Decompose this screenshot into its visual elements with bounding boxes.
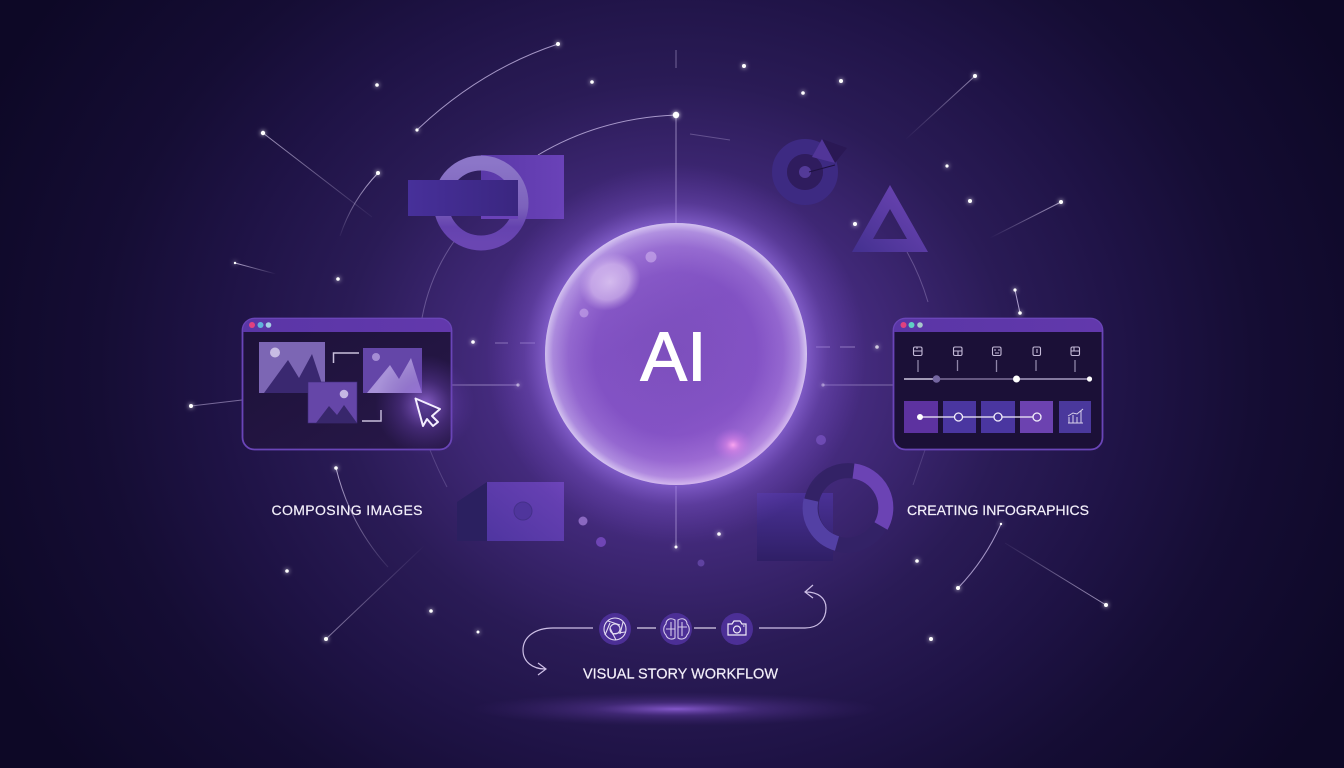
chart tiles xyxy=(904,401,1091,433)
node connector xyxy=(917,413,1041,421)
connector lines and orbit curves xyxy=(191,44,1106,639)
arrow: left return xyxy=(523,628,593,675)
sphere label: AI xyxy=(640,318,707,396)
selection brackets xyxy=(334,353,381,421)
shape: triangle, top right xyxy=(852,185,928,252)
icon: cursor xyxy=(416,398,440,426)
star field xyxy=(189,42,1108,641)
image thumbnail small xyxy=(308,382,357,423)
panel: creating infographics window xyxy=(894,318,1102,450)
floor glow xyxy=(471,692,881,726)
tick marks xyxy=(918,360,1075,372)
step icons xyxy=(914,347,1080,356)
icon: camera xyxy=(721,613,753,645)
panel: composing images window xyxy=(242,318,475,455)
window dots xyxy=(249,322,271,328)
arrow: right return xyxy=(759,585,826,628)
image thumbnail large xyxy=(259,342,325,393)
image thumbnail right xyxy=(363,348,422,393)
icon: aperture xyxy=(599,613,631,645)
shape: donut and square, bottom right xyxy=(757,471,886,561)
shape: target ring with wedge, top right xyxy=(780,139,847,198)
decorative bubbles xyxy=(578,435,826,566)
label: visual story workflow: VISUAL STORY WORKFLOW xyxy=(583,666,778,682)
workflow xyxy=(523,585,826,675)
label: composing images: COMPOSING IMAGES xyxy=(272,502,422,518)
sphere highlight xyxy=(568,242,652,322)
timeline slider xyxy=(904,375,1092,383)
central AI sphere xyxy=(486,164,866,544)
shape: box with dot, bottom left xyxy=(457,482,564,541)
shape: ring with overlapping rectangles, top left xyxy=(408,155,564,243)
label: creating infographics: CREATING INFOGRAPHICS xyxy=(907,502,1089,518)
window dots xyxy=(900,322,923,328)
icon: brain xyxy=(660,613,692,645)
icon: mini bar chart xyxy=(1068,409,1083,423)
